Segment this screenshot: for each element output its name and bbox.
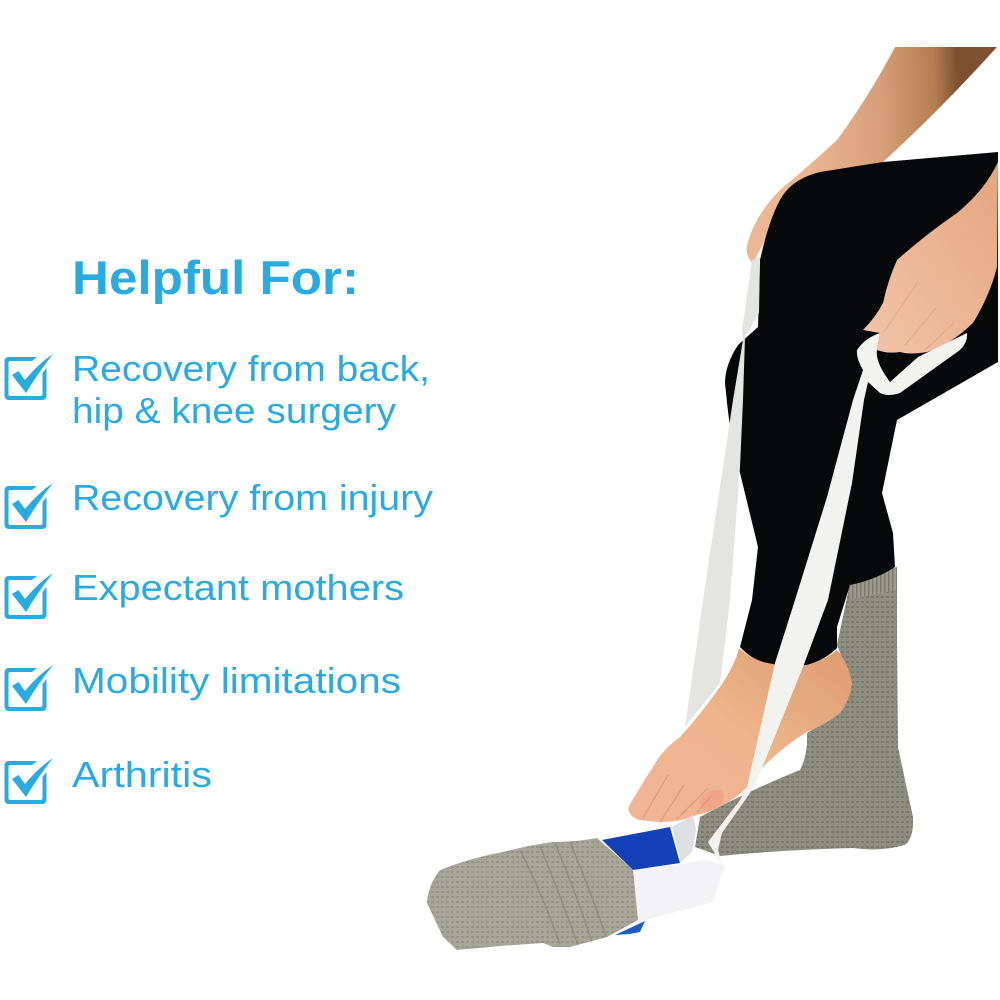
sock aid: white tab — [672, 815, 696, 862]
text: recovery from back, hip and knee surgery — [72, 348, 430, 431]
list item: arthritis — [4, 754, 212, 804]
list item: recovery from surgery — [4, 348, 430, 431]
text: mobility limitations: Mobility limitations — [72, 660, 401, 701]
text: expectant mothers: Expectant mothers — [72, 567, 404, 608]
icon: checkbox — [4, 665, 53, 711]
icon: checkbox — [4, 758, 53, 804]
back strap — [685, 257, 760, 727]
icon: checkbox — [4, 354, 53, 400]
text: recovery from back, hip and knee surgery: Recovery from back, — [72, 348, 430, 389]
icon: checkbox — [4, 483, 53, 529]
sock aid: white padded shell — [633, 860, 725, 922]
sock aid: blue inner — [602, 827, 680, 870]
photo: person using sock aid — [427, 47, 998, 950]
standing sock on far foot — [695, 567, 913, 856]
list item: recovery from injury — [4, 477, 433, 529]
arm and left hand — [747, 47, 997, 264]
icon: checkbox — [4, 573, 53, 619]
front strap and loop — [708, 333, 967, 867]
text: recovery from injury: Recovery from injury — [72, 477, 433, 518]
text: arthritis: Arthritis — [72, 754, 212, 795]
list item: mobility limitations — [4, 660, 401, 711]
list item: expectant mothers — [4, 567, 404, 619]
gathered sock on aid — [427, 838, 638, 950]
right hand and forearm — [863, 162, 998, 354]
text: recovery from back, hip and knee surgery: hip & knee surgery — [72, 390, 396, 431]
sock aid: blue underside — [615, 921, 645, 935]
bare foot — [628, 648, 852, 822]
heading: Helpful For: Helpful For: — [72, 251, 359, 304]
black leggings — [725, 152, 998, 666]
